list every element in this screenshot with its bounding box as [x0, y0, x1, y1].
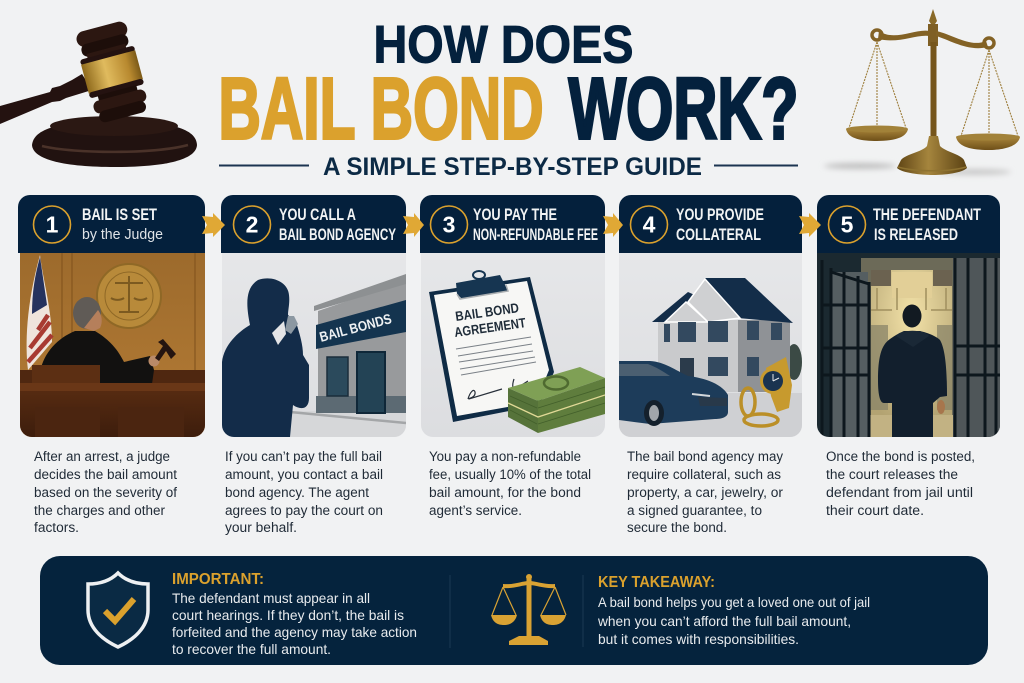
icon: gavel on sound block [0, 19, 197, 167]
arrow: 1 to 2 [202, 213, 225, 237]
step 1 description [34, 449, 177, 535]
step 3 description: agent’s service. [429, 503, 522, 518]
step 5 description: defendant from jail until [826, 485, 973, 500]
step 1 header [18, 195, 205, 253]
panel: bottom callouts [40, 556, 988, 665]
callout: key takeaway: A bail bond helps you get a loved one out of jail [598, 594, 870, 610]
step 1 description: factors. [34, 520, 79, 535]
icon: shield with check [88, 573, 148, 647]
step 3 header: NON-REFUNDABLE FEE [473, 226, 598, 244]
step 3 description: fee, usually 10% of the total [429, 467, 591, 482]
step 1 description: After an arrest, a judge [34, 449, 170, 464]
step 3 description [429, 449, 591, 518]
image: caller and bail bonds office: BAIL BONDS [318, 310, 393, 345]
step 3 header [420, 195, 605, 253]
callout: important: forfeited and the agency may take action [172, 624, 417, 640]
step 1 description: decides the bail amount [34, 467, 177, 482]
callout: important: IMPORTANT: [172, 571, 264, 588]
title word: work: WORK? [568, 60, 798, 158]
arrow: 4 to 5 [799, 213, 821, 237]
callout: key takeaway: KEY TAKEAWAY: [598, 574, 715, 591]
image: caller and bail bonds office [222, 250, 406, 437]
panel: step 5 [817, 195, 1000, 518]
step 1 header: BAIL IS SET [82, 206, 157, 224]
step 2 header [221, 195, 406, 253]
icon: brass scales of justice [824, 9, 1020, 175]
step 2 header: BAIL BOND AGENCY [279, 226, 396, 244]
step 2 description: bond agency. The agent [225, 485, 369, 500]
title line: how does: HOW DOES [374, 16, 634, 74]
image: house car and jewelry collateral [619, 250, 802, 437]
step 4 description: secure the bond. [627, 520, 727, 535]
callout: important: to recover the full amount. [172, 641, 331, 657]
panel: step 4 [619, 195, 802, 535]
step 4 description: require collateral, such as [627, 467, 781, 482]
image: agreement clipboard and cash: AGREEMENT [453, 315, 527, 340]
step 2 header: 2 [246, 212, 258, 238]
callout: key takeaway [597, 574, 870, 647]
step 4 description: property, a car, jewelry, or [627, 485, 784, 500]
step 4 header: COLLATERAL [676, 226, 761, 244]
step 4 header: 4 [643, 212, 656, 238]
step 1 header: by the Judge [82, 226, 163, 243]
step 4 header: YOU PROVIDE [676, 206, 764, 224]
callout: important: court hearings. If they don’t, the bail is [172, 607, 404, 623]
step 4 header [619, 195, 802, 253]
panel: step 1 [18, 195, 205, 535]
step 5 header [817, 195, 1000, 253]
step 2 description: amount, you contact a bail [225, 467, 383, 482]
arrow: 3 to 4 [603, 213, 623, 237]
step 5 description: their court date. [826, 503, 924, 518]
step 2 description: your behalf. [225, 520, 297, 535]
step 3 header: YOU PAY THE [473, 206, 557, 224]
step 4 description [627, 449, 784, 535]
step 5 description: the court releases the [826, 467, 958, 482]
step 1 description: based on the severity of [34, 485, 177, 500]
subtitle with rules: A SIMPLE STEP-BY-STEP GUIDE [323, 153, 702, 181]
image: defendant walking out of jail [817, 250, 1000, 437]
image: agreement clipboard and cash: BAIL BOND [454, 300, 520, 324]
step 3 description: bail amount, for the bond [429, 485, 581, 500]
panel: step 3 [420, 195, 605, 518]
title [218, 16, 798, 158]
step 1 description: the charges and other [34, 503, 166, 518]
step 4 description: The bail bond agency may [627, 449, 783, 464]
callout: important: The defendant must appear in all [172, 590, 370, 606]
step 1 header: 1 [46, 212, 59, 238]
callout: key takeaway: when you can’t afford the full bail amount, [597, 613, 851, 629]
step 5 header: 5 [841, 212, 854, 238]
panel: step 2 [221, 195, 406, 535]
image: judge in courtroom [20, 250, 205, 437]
icon: gold scales [491, 574, 566, 645]
step 2 description [225, 449, 383, 535]
step 2 description: If you can’t pay the full bail [225, 449, 382, 464]
step 5 header: IS RELEASED [874, 226, 958, 244]
title word: bail bond: BAIL BOND [218, 60, 544, 158]
callout: important [172, 571, 417, 657]
callout: key takeaway: but it comes with responsibilities. [598, 631, 799, 647]
image: agreement clipboard and cash [421, 250, 605, 437]
step 2 description: agrees to pay the court on [225, 503, 383, 518]
step 3 header: 3 [443, 212, 455, 238]
arrow: 2 to 3 [403, 213, 424, 237]
step 3 description: You pay a non-refundable [429, 449, 581, 464]
step 5 header: THE DEFENDANT [873, 206, 981, 224]
step 4 description: a signed guarantee, to [627, 503, 762, 518]
step 2 header: YOU CALL A [279, 206, 356, 224]
step 5 description: Once the bond is posted, [826, 449, 975, 464]
step 5 description [826, 449, 975, 518]
